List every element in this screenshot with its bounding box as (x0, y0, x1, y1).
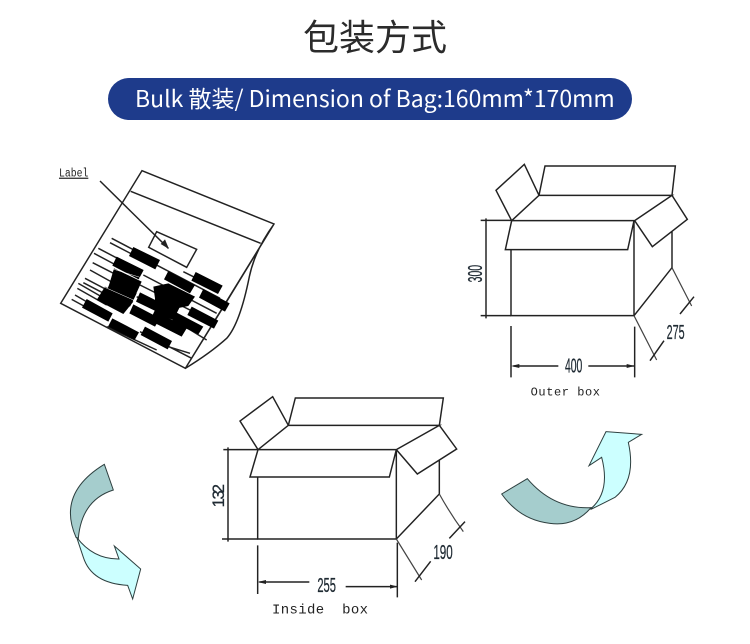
depth leader lines (396, 494, 463, 580)
arrow tail (70, 464, 113, 538)
label rectangle on bag (149, 232, 197, 267)
arrow head (589, 432, 642, 509)
caption: Inside box: Inside box (272, 603, 368, 619)
arrow tail (502, 479, 591, 524)
dimension 300: 300 (464, 265, 487, 282)
outer box dimensions (481, 218, 694, 377)
label text: Label (59, 167, 88, 181)
dimension arrowheads (511, 364, 635, 368)
dimension 190: 190 (433, 541, 453, 564)
bag diagram with label (59, 167, 274, 368)
outer box body and flaps (496, 164, 687, 316)
label arrow (100, 181, 169, 249)
left curved arrow (70, 464, 141, 599)
inside box body and flaps (240, 397, 457, 539)
dimension 255: 255 (317, 574, 336, 597)
inside box dimensions (222, 447, 465, 597)
right curved arrow (502, 432, 642, 524)
dimension 275: 275 (667, 321, 685, 344)
dimension arrowheads (258, 580, 398, 589)
inside box diagram (209, 397, 465, 619)
bag contents: lead wires (72, 238, 220, 358)
arrow head (77, 537, 141, 599)
dimension 400: 400 (565, 355, 582, 378)
caption: Outer box: Outer box (531, 385, 600, 399)
outer box diagram (464, 164, 694, 399)
title: 包装方式 (303, 9, 447, 61)
dimension 132: 1 32 (209, 484, 228, 507)
white highlights between components (103, 268, 143, 301)
bag contents: black components (82, 247, 230, 349)
bag outline (61, 171, 274, 368)
banner: bag dimension: Bulk 散装/ Dimension of Bag:160mm*170mm (135, 80, 615, 114)
depth leader lines (634, 268, 692, 360)
